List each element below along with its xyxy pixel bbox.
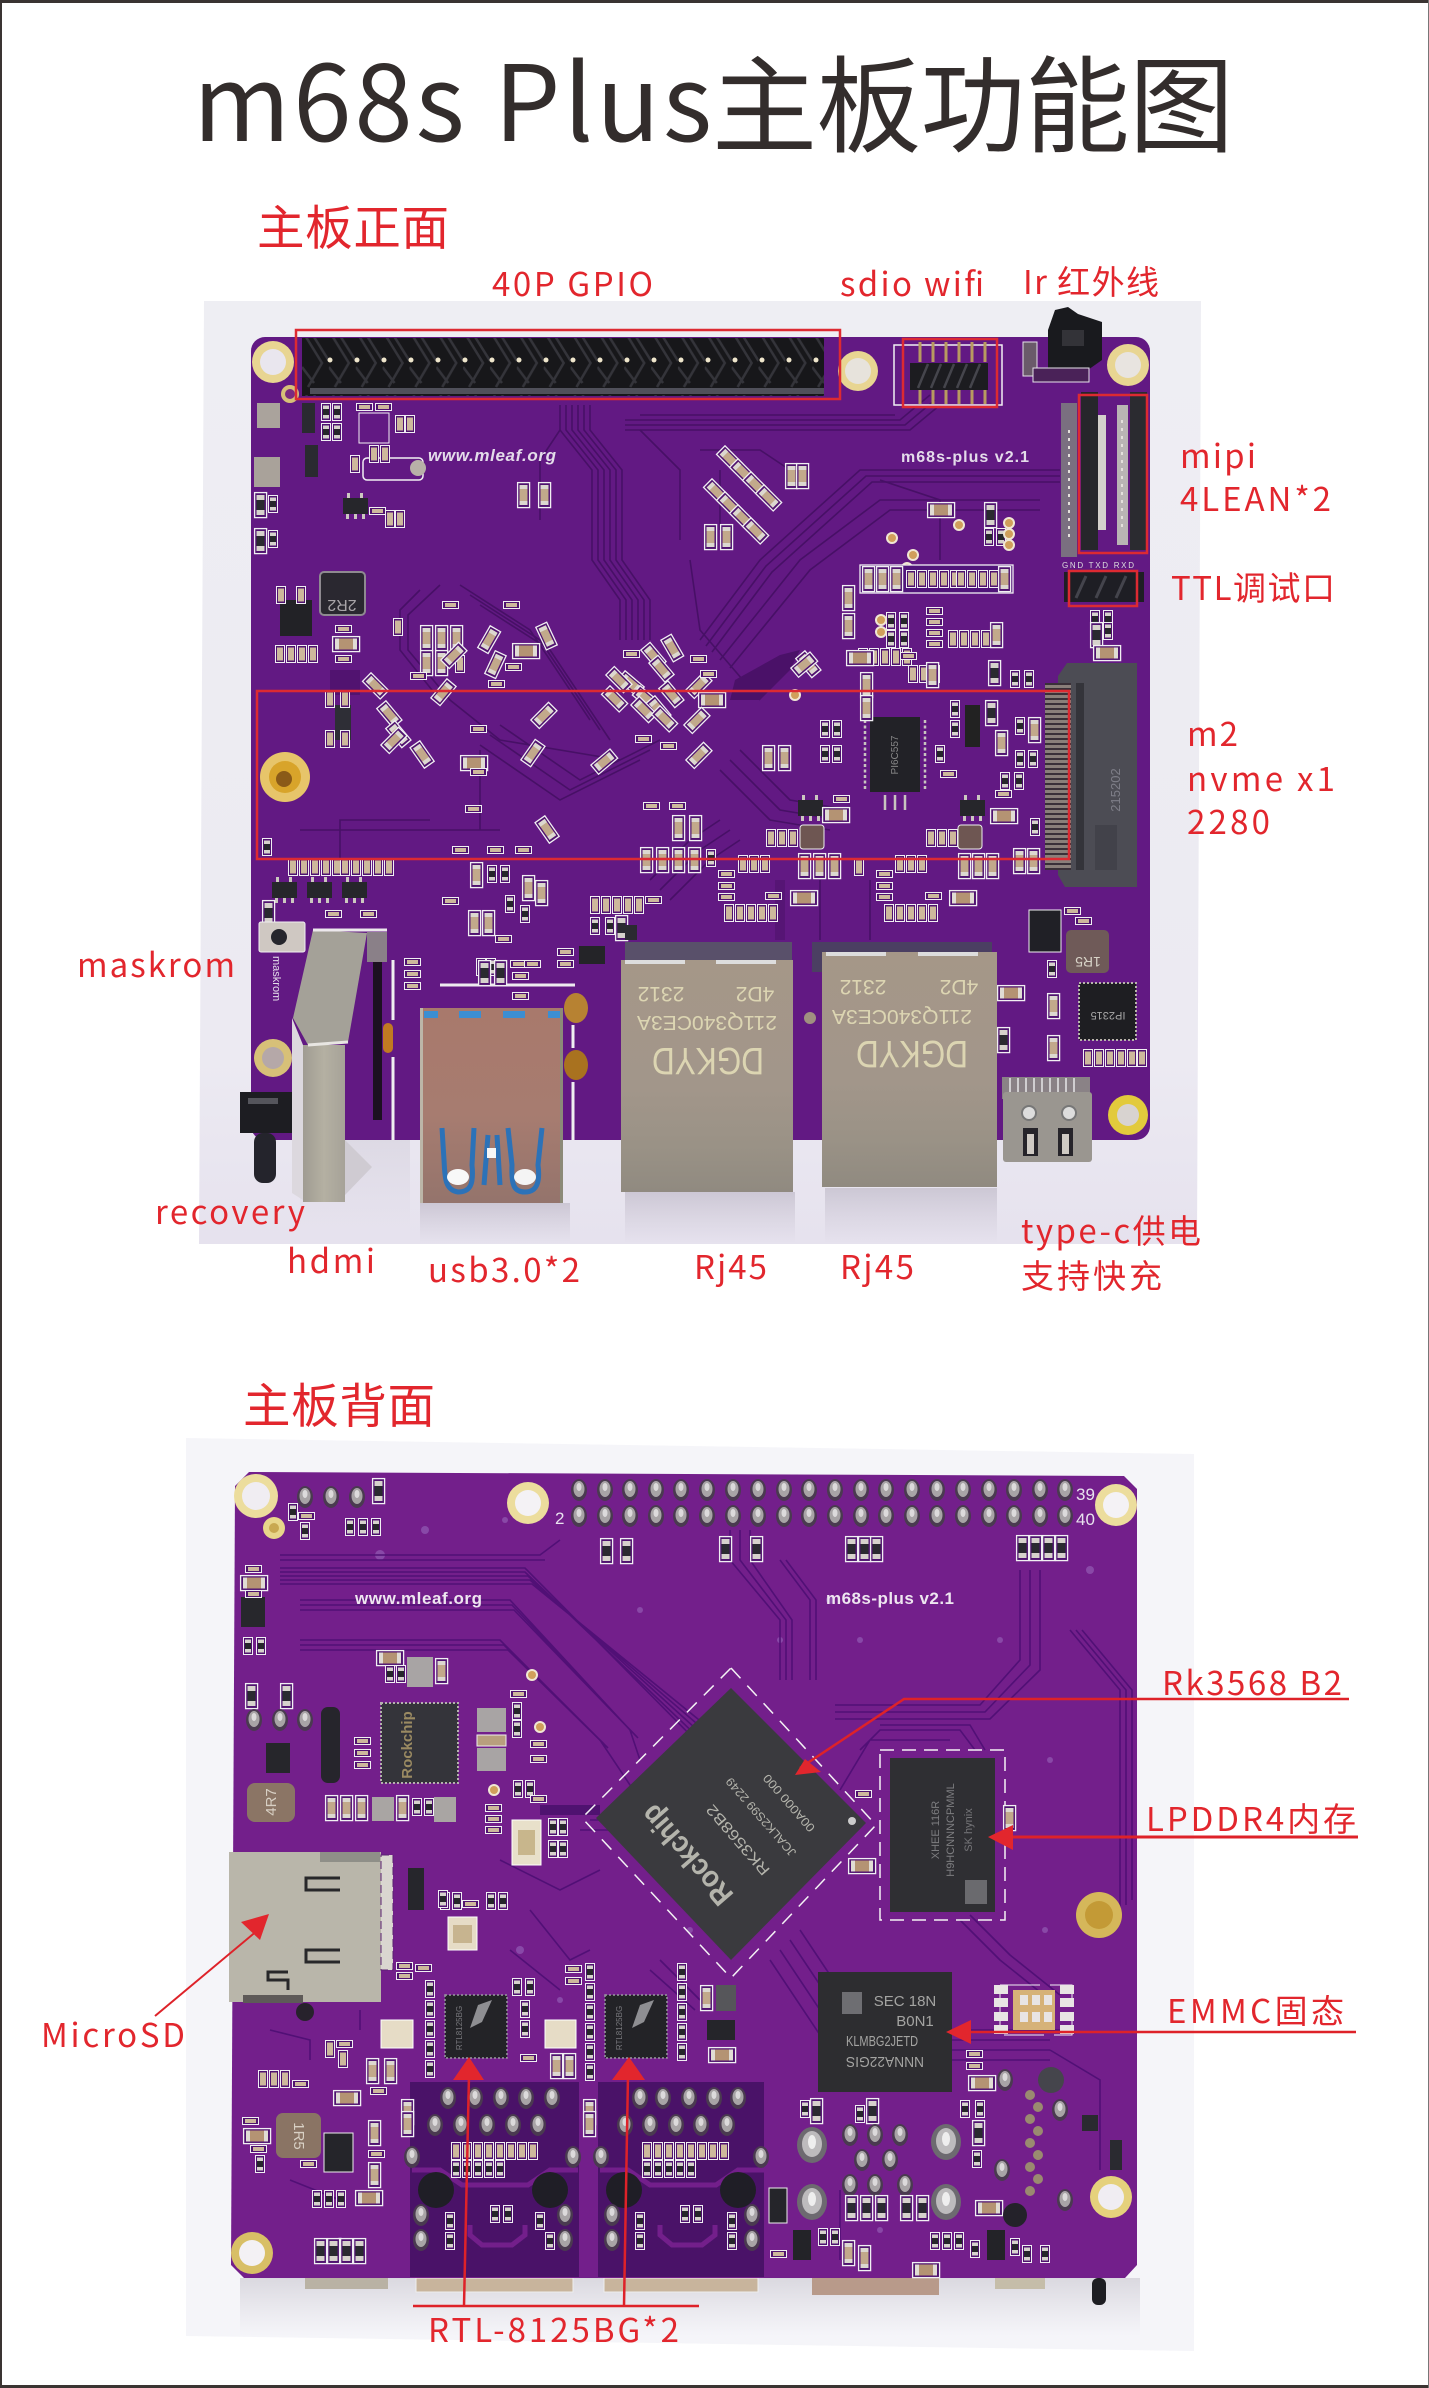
- Rockchip PMIC: Rockchip: [399, 1711, 416, 1779]
- inductor 1R5: 1R5: [1075, 954, 1101, 970]
- RK3568 chip: RK3568B2: [703, 1801, 774, 1878]
- PCB traces: [270, 1530, 1132, 2260]
- callout: LPDDR4: [988, 1793, 1358, 1850]
- dark copper under controller: [540, 1805, 600, 1815]
- eMMC chip: NNNA22GIS: [846, 2053, 924, 2070]
- callout: Rk3568 B2: Rk3568 B2: [1162, 1657, 1342, 1705]
- SMD components: mid left cluster: [276, 586, 557, 776]
- callout: MicroSD: MicroSD: [41, 2009, 185, 2057]
- photo background: [186, 1438, 1194, 2351]
- front board callout labels: 支持快充: [1021, 1250, 1162, 1298]
- front board callout labels: TTL调试口: [1171, 562, 1335, 610]
- Type-C connector: [1002, 1077, 1092, 1162]
- IR jack: [1023, 307, 1102, 382]
- 40P GPIO header: [302, 338, 824, 396]
- silkscreen labels: www.mleaf.org: [428, 446, 557, 465]
- GPIO solder pins: 39: [1076, 1485, 1095, 1504]
- sdio wifi header: [894, 342, 1002, 405]
- callout: MicroSD: [41, 1914, 269, 2057]
- front board callout labels: Rj45: [694, 1241, 767, 1289]
- IC IP2315: [1079, 983, 1136, 1040]
- front board callout labels: sdio wifi: [840, 258, 984, 306]
- recovery button: [240, 1092, 292, 1183]
- dark copper areas: [330, 650, 800, 940]
- RJ45 connector 1: 4D2: [736, 982, 774, 1005]
- SMD components: right of long box: [763, 673, 1041, 790]
- panel: back board photo: [186, 1438, 1194, 2351]
- brass standoff: [260, 752, 310, 802]
- SMD components: upper left: [254, 403, 809, 554]
- m.2 NVMe slot: 215202: [1108, 768, 1123, 812]
- SMD components: upper left: [241, 1479, 448, 1783]
- eMMC chip: [818, 1972, 952, 2092]
- RJ45 connector 2: DGKYD: [856, 1032, 968, 1074]
- LPDDR4 chip: XHEE 116R: [930, 1801, 942, 1859]
- front board callout labels: 40P GPIO: [492, 258, 653, 306]
- callout: RTL-8125BG: [413, 2057, 699, 2352]
- heading: board back: 主板背面: [243, 1368, 435, 1437]
- SMD components: lower rows: [262, 790, 1146, 1066]
- silkscreen labels: m68s-plus v2.1: [901, 449, 1029, 466]
- front board callout labels: recovery: [155, 1186, 305, 1234]
- RK3568 chip: Rockchip: [635, 1798, 740, 1912]
- inductor 2R2: 2R2: [327, 596, 357, 613]
- m.2 NVMe slot: [1045, 663, 1137, 887]
- RJ45 connector 1: DGKYD: [652, 1039, 764, 1081]
- title: 主板功能图: [712, 23, 1234, 175]
- TTL header: GND TXD RXD: [1062, 561, 1134, 570]
- PCB mottling: [337, 1517, 1094, 2243]
- front board callout labels: maskrom: [77, 939, 235, 987]
- front board callout labels: 4LEAN*2: [1180, 473, 1331, 521]
- front board callout labels: type-c供电: [1021, 1205, 1201, 1253]
- microSD slot: [229, 1852, 393, 2021]
- eMMC chip: KLMBG2JETD: [846, 2033, 918, 2050]
- RTL8125BG chips: RTL8125BG: [455, 2006, 464, 2050]
- PCB: [231, 1472, 1137, 2278]
- connectors under board: [305, 2278, 1106, 2305]
- red highlight boxes: [257, 330, 1147, 859]
- front board callout labels: Ir 红外线: [1023, 256, 1159, 304]
- HDMI connector: [292, 930, 393, 1202]
- USB 3.0 connector: [420, 961, 588, 1203]
- IC PI6C557: [865, 717, 925, 810]
- front board callout labels: mipi: [1180, 430, 1256, 478]
- front board callout labels: nvme x1: [1187, 753, 1335, 801]
- board shadow: [240, 2278, 1140, 2336]
- callout: LPDDR4: LPDDR4内存: [1146, 1793, 1356, 1841]
- silkscreen labels: www.mleaf.org: [354, 1589, 482, 1608]
- RJ45 connector 2: 2312: [840, 975, 886, 998]
- GPIO solder pins: 2: [555, 1509, 564, 1528]
- RJ45 connector 2: 4D2: [940, 975, 978, 998]
- maskrom button: [259, 922, 305, 952]
- silkscreen labels: [270, 446, 1029, 1001]
- RJ45 connector 2: 211Q340CE3A: [831, 1005, 972, 1027]
- callout: EMMC: [946, 1985, 1356, 2044]
- RJ45 connector 1: 2312: [638, 982, 684, 1005]
- ethernet solder and capacitors: [402, 2087, 769, 2251]
- connector shadows: [300, 1140, 997, 1244]
- silkscreen labels: maskrom: [270, 956, 282, 1001]
- callout: EMMC: EMMC固态: [1167, 1985, 1344, 2033]
- front board callout labels: usb3.0*2: [428, 1244, 580, 1292]
- title: m68s Plus: [193, 20, 712, 172]
- LPDDR4 chip: H9HCNNNCPMML: [945, 1783, 957, 1877]
- callout: RTL-8125BG: RTL-8125BG*2: [428, 2304, 679, 2352]
- TTL header: [1062, 561, 1144, 602]
- USB contact slots: [442, 1128, 542, 1192]
- RK3568 chip: [582, 1668, 876, 1978]
- GPIO solder pins: [555, 1479, 1095, 1529]
- silkscreen labels: m68s-plus v2.1: [826, 1589, 954, 1608]
- RTL8125BG chips: RTL8125BG: [615, 2006, 624, 2050]
- SMD components: gray blocks and caps: [326, 1536, 1068, 1910]
- eMMC chip: B0N1: [896, 2013, 934, 2030]
- front board callout labels: [77, 256, 1335, 1298]
- SMD components: lower left: [242, 1890, 736, 2264]
- callout: Rk3568 B2: [795, 1657, 1349, 1775]
- RJ45 connector 1: 211Q340CE3A: [636, 1011, 777, 1033]
- mounting holes: [231, 1474, 1137, 2274]
- RTL8125BG chips: [445, 1995, 667, 2058]
- LPDDR4 chip: [880, 1750, 1005, 1920]
- SMD components: lower right: [769, 1985, 1122, 2278]
- RK3568 chip: 00A000 000: [760, 1771, 818, 1835]
- front board callout labels: Rj45: [840, 1241, 914, 1289]
- IC PI6C557: PI6C557: [890, 735, 901, 774]
- photo background: [199, 301, 1201, 1244]
- SMD components: diagonal chains: [704, 446, 782, 544]
- RJ45 connector 2: [804, 942, 997, 1187]
- inductor 1R5: [1066, 930, 1109, 973]
- Rockchip PMIC: [381, 1703, 458, 1783]
- SMD components: upper right: [843, 503, 1121, 688]
- inductors: [247, 1783, 321, 2158]
- eMMC chip: SEC 18N: [874, 1993, 936, 2010]
- inductors: 1R5: [290, 2122, 307, 2150]
- RJ45 connector 1: [621, 942, 793, 1192]
- PCB traces: [300, 395, 1060, 940]
- GPIO solder pins: 40: [1076, 1510, 1095, 1529]
- front board callout labels: hdmi: [287, 1235, 375, 1283]
- LPDDR4 chip: SK hynix: [963, 1808, 975, 1852]
- inductors: 4R7: [263, 1788, 280, 1816]
- heading: board front: 主板正面: [257, 190, 449, 259]
- silkscreen labels: [354, 1589, 954, 1608]
- mounting holes: [252, 341, 1149, 1135]
- IC IP2315: IP2315: [1091, 1009, 1125, 1021]
- front board callout labels: m2: [1187, 708, 1238, 756]
- front board callout labels: 2280: [1187, 796, 1270, 844]
- title: [193, 20, 1234, 175]
- SMD components: central diagonal cluster: [591, 634, 821, 774]
- panel: front board photo: [199, 301, 1201, 1244]
- inductor 2R2: [320, 572, 365, 615]
- RK3568 chip: JCALK2S99 2249: [723, 1774, 799, 1859]
- ethernet dark zones: [410, 2082, 764, 2277]
- mipi connectors: [1061, 392, 1147, 557]
- PCB: [251, 337, 1150, 1140]
